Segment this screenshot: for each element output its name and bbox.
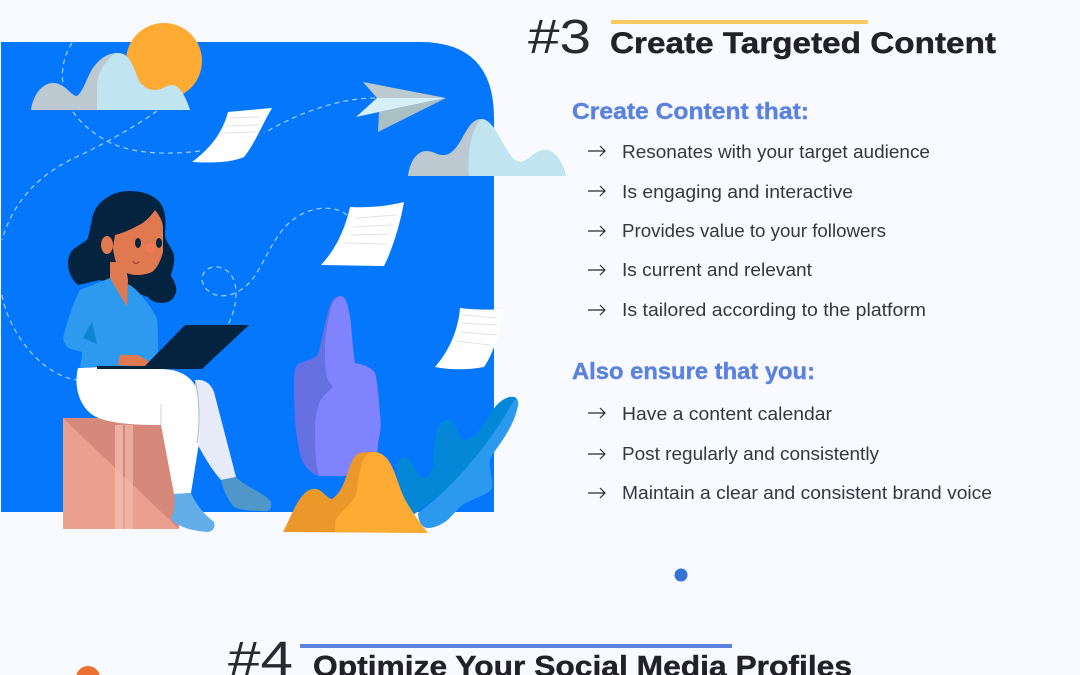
smile [133, 261, 139, 263]
paper plane [356, 82, 446, 132]
sun [126, 23, 202, 99]
paper sheet 3 [435, 308, 504, 369]
subheading: Also ensure that you: Also ensure that you: [572, 358, 815, 384]
dashed flight paths [2, 43, 375, 380]
blue background panel [1, 42, 494, 512]
paper sheet 2 [321, 202, 404, 266]
list: content qualities: Is current and relevant [622, 260, 812, 280]
cloud left [31, 53, 190, 110]
orange connector dot [76, 666, 100, 675]
cardboard box [63, 418, 179, 529]
leaf plant [397, 397, 518, 528]
cloud right [408, 119, 566, 176]
list: ensure items: Post regularly and consistently [622, 444, 879, 464]
back leg [195, 380, 236, 480]
subheading: Create Content that: Create Content that: [572, 98, 809, 124]
yellow heading rule [611, 20, 868, 24]
cheek [145, 243, 155, 253]
list: content qualities: Is tailored according to the platform [622, 300, 926, 320]
neck [110, 262, 128, 307]
list: ensure items: Have a content calendar [622, 404, 832, 424]
paper sheet 1 [192, 108, 272, 162]
list: content qualities: Is engaging and interactive [622, 182, 853, 202]
blue connector dot [674, 568, 688, 582]
laptop [97, 325, 249, 369]
heading: Create Targeted Content: Create Targeted Content [610, 27, 996, 60]
list: ensure items: Maintain a clear and consistent brand voice [622, 483, 992, 503]
hair [68, 191, 176, 303]
list: content qualities [588, 142, 930, 320]
number #3: #3 [528, 11, 591, 64]
hand [118, 355, 150, 367]
list: ensure items [588, 404, 992, 503]
face [113, 210, 163, 275]
woman sitting with laptop [63, 191, 271, 532]
list: content qualities: Resonates with your target audience [622, 142, 930, 162]
shirt [63, 278, 158, 367]
list: content qualities: Provides value to your followers [622, 221, 886, 241]
front sock [171, 493, 215, 532]
orange hill [283, 452, 428, 533]
purple thumbs-up shape [294, 296, 381, 476]
blue heading rule [300, 644, 732, 648]
ear [101, 236, 113, 254]
eyes [135, 238, 141, 248]
pants [76, 367, 200, 494]
back sock [221, 477, 271, 511]
